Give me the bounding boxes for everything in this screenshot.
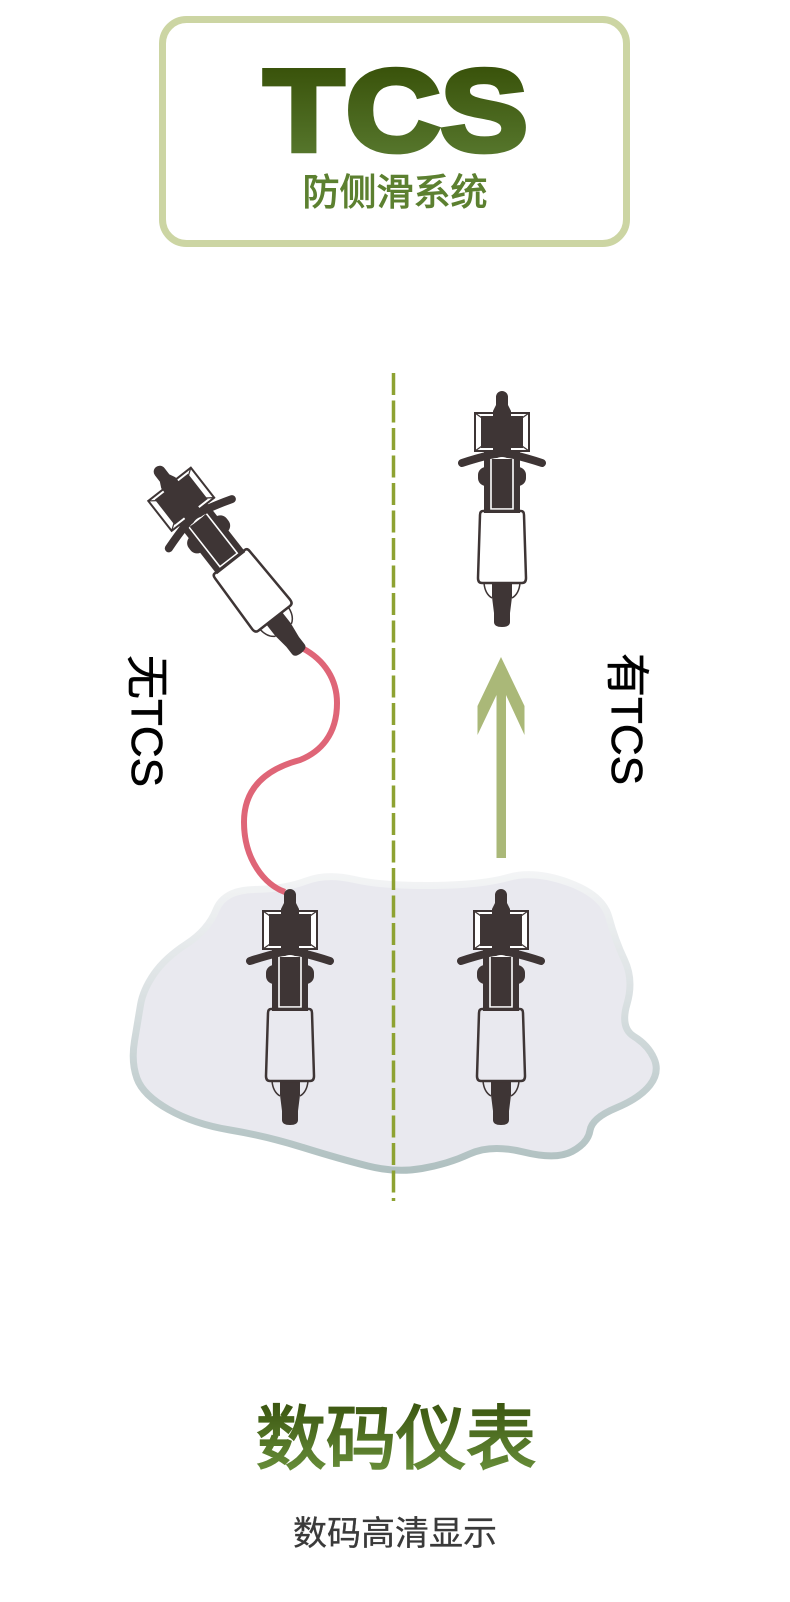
- title panel: [162, 20, 626, 244]
- motorcycle: on puddle with TCS: [461, 889, 541, 1125]
- subtitle: 防侧滑系统: [302, 172, 488, 213]
- center dashed divider: [392, 373, 395, 1201]
- motorcycle: skidding without TCS: [124, 442, 333, 678]
- label: with TCS: 有TCS: [602, 653, 651, 785]
- caption: digital HD display: 数码高清显示: [293, 1515, 497, 1553]
- motorcycle: straight with TCS: [462, 391, 542, 627]
- puddle: [133, 875, 656, 1170]
- title box frame: [162, 20, 626, 244]
- skid path: [244, 648, 337, 892]
- motorcycle: on puddle without TCS: [250, 889, 330, 1125]
- heading: digital instrument: 数码仪表: [256, 1400, 536, 1478]
- arrow: straight travel: [478, 657, 524, 858]
- label: without TCS: 无TCS: [122, 655, 171, 787]
- title: TCS: TCS: [264, 46, 528, 176]
